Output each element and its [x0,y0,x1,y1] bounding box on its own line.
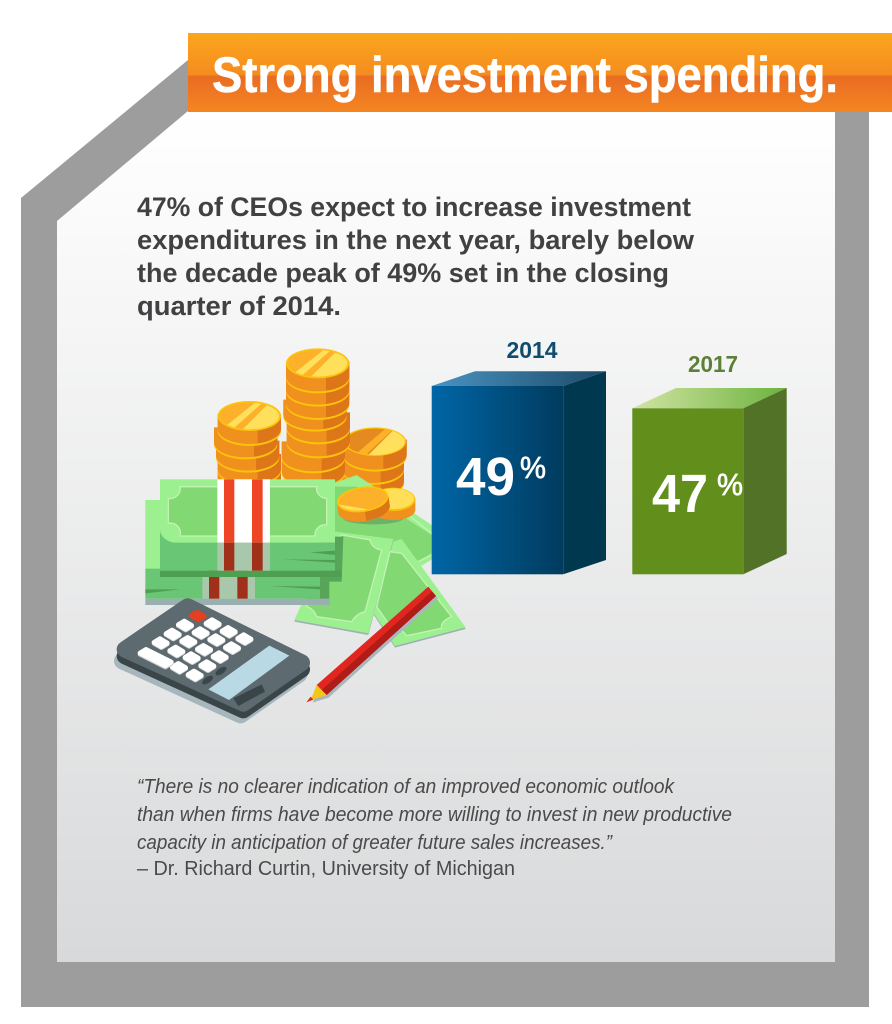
quote: “There is no clearer indication of an improved economic outlook [137,776,675,798]
intro text: quarter of 2014. [137,291,341,321]
icon: calculator [122,607,302,715]
icon: loose banknotes [294,475,466,648]
illustration: money, coins and calculator [122,348,466,715]
label: 2014: 2014 [506,337,558,363]
icon: banknote bundles [145,479,343,605]
value: 49% [456,447,546,507]
icon: pencil [306,587,438,703]
intro text [137,192,695,321]
intro text: 47% of CEOs expect to increase investment [137,192,691,222]
value: 49%: % [520,450,546,485]
quote: capacity in anticipation of greater future sales increases.” [137,832,613,854]
title: Strong investment spending. [212,47,838,103]
value: 47%: % [717,467,743,502]
quote: – Dr. Richard Curtin, University of Michigan [137,858,515,880]
value: 47% [652,464,743,524]
bar: 2017 [632,351,787,574]
calculator keys [140,620,251,686]
label: 2017: 2017 [688,351,738,377]
quote [137,776,732,880]
intro text: expenditures in the next year, barely below [137,225,695,255]
calculator screen [208,646,289,700]
title banner [188,33,892,112]
value: 47%: 47 [652,464,708,524]
quote: than when firms have become more willing to invest in new productive [137,804,732,826]
icon: coin stacks [214,348,415,499]
icon: small coins [335,483,415,525]
intro text: the decade peak of 49% set in the closing [137,258,669,288]
bar: 2014 [432,337,606,574]
value: 49%: 49 [456,447,515,507]
